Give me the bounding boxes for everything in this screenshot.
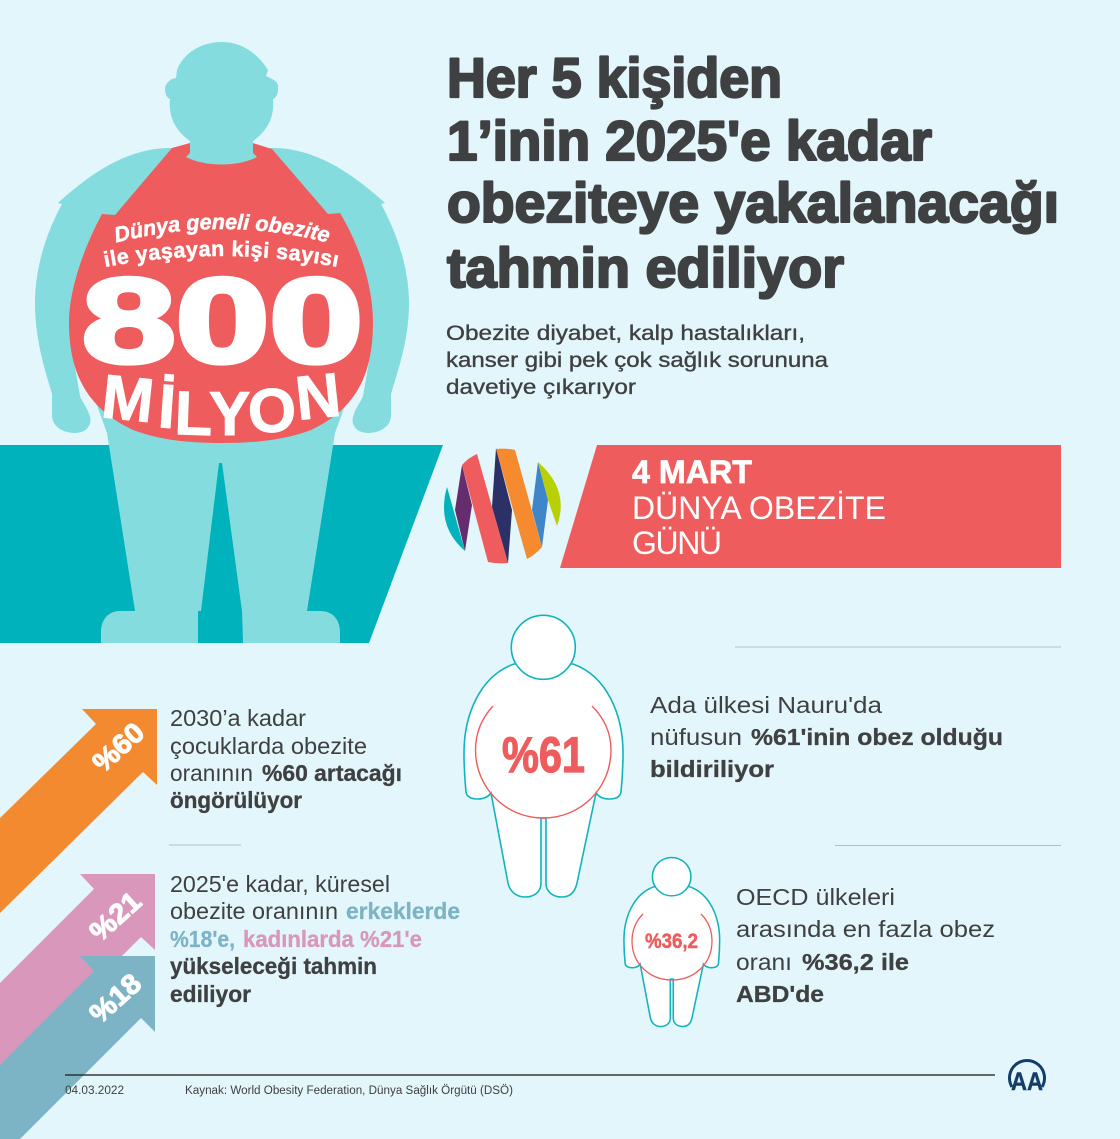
text: children forecast: 2030’a kadar (170, 705, 306, 731)
banner: world obesity day: GÜNÜ (632, 525, 722, 561)
belly arc (632, 914, 712, 980)
shirt caption: Dünya geneli obezite (116, 214, 330, 243)
subtitle: davetiye çıkarıyor (446, 376, 636, 399)
figure outline (464, 615, 623, 897)
icon: agency logo: AA (1011, 1068, 1043, 1096)
text: global forecast by sex: yükseleceği tahmin (170, 953, 377, 979)
text: Nauru: Ada ülkesi Nauru'da (650, 692, 883, 718)
text: OECD: arasında en fazla obez (736, 916, 995, 942)
red shirt (69, 143, 373, 443)
text: children forecast (170, 705, 402, 813)
banner: world obesity day: DÜNYA OBEZİTE (632, 490, 886, 526)
subtitle: Obezite diyabet, kalp hastalıkları, (446, 322, 805, 345)
arrow: blue 18 percent (0, 956, 155, 1139)
figure head (165, 42, 278, 170)
date: 04.03.2022 (65, 1085, 124, 1097)
source: Kaynak: World Obesity Federation, Dünya Sağlık Örgütü (DSÖ) (185, 1085, 513, 1097)
headline: tahmin ediliyor (447, 236, 844, 299)
headline: 1’inin 2025'e kadar (447, 109, 932, 172)
footer rule (65, 1074, 995, 1076)
text: Nauru: bildiriliyor (650, 756, 774, 782)
figure value: %36,2 (645, 930, 698, 953)
text: global forecast by sex: erkeklerde (346, 898, 460, 924)
headline: Her 5 kişiden (447, 46, 782, 109)
text: children forecast: %60 artacağı (262, 760, 402, 786)
text: global forecast by sex: obezite oranının (170, 898, 338, 924)
text: OECD: %36,2 ile (802, 949, 909, 975)
headline (447, 46, 1059, 299)
figure value: %61 (502, 727, 585, 783)
800 number: 800 (82, 254, 363, 388)
belly arc (476, 706, 611, 818)
icon: figure 61 percent (464, 615, 623, 897)
shirt caption (104, 214, 338, 267)
text: Nauru (650, 692, 1003, 782)
text: OECD (736, 884, 995, 1007)
teal band behind figure (0, 445, 443, 643)
headline: obeziteye yakalanacağı (447, 171, 1059, 234)
figure outline (624, 857, 720, 1026)
subtitle (446, 322, 828, 399)
arrow: pink 21 percent (0, 874, 155, 1065)
text: children forecast: oranının (170, 760, 253, 786)
arrow: orange 60 percent: %60 (86, 716, 150, 778)
icon: figure 36,2 percent (624, 857, 720, 1026)
text: OECD: ABD'de (736, 981, 824, 1007)
text: global forecast by sex: 2025'e kadar, küresel (170, 871, 390, 897)
rule: left column (169, 844, 241, 846)
banner: world obesity day (560, 445, 1061, 568)
figure arms (35, 148, 409, 433)
milyon word: MİLYON (99, 361, 344, 449)
large figure with red shirt (35, 42, 409, 643)
text: OECD: OECD ülkeleri (736, 884, 895, 910)
text: Nauru: nüfusun (650, 724, 742, 750)
arrow: pink 21 percent: %21 (83, 885, 147, 947)
text: Nauru: %61'inin obez olduğu (751, 724, 1003, 750)
text: children forecast: çocuklarda obezite (170, 733, 367, 759)
text: children forecast: öngörülüyor (170, 787, 302, 813)
text: global forecast by sex: %18'e, (170, 926, 235, 952)
banner: world obesity day: 4 MART (632, 454, 752, 490)
shirt caption: ile yaşayan kişi sayısı (104, 240, 338, 267)
rule: above OECD (835, 845, 1061, 846)
text: global forecast by sex: ediliyor (170, 981, 251, 1007)
figure legs and feet (95, 400, 347, 643)
arrow: orange 60 percent (0, 709, 157, 913)
rule: above Nauru (735, 646, 1061, 648)
text: OECD: oranı (736, 949, 792, 975)
text: global forecast by sex: kadınlarda %21'e (243, 926, 422, 952)
subtitle: kanser gibi pek çok sağlık sorununa (446, 349, 828, 372)
arrow: blue 18 percent: %18 (83, 967, 147, 1029)
text: global forecast by sex (170, 871, 460, 1007)
icon: world obesity day logo (444, 448, 561, 563)
